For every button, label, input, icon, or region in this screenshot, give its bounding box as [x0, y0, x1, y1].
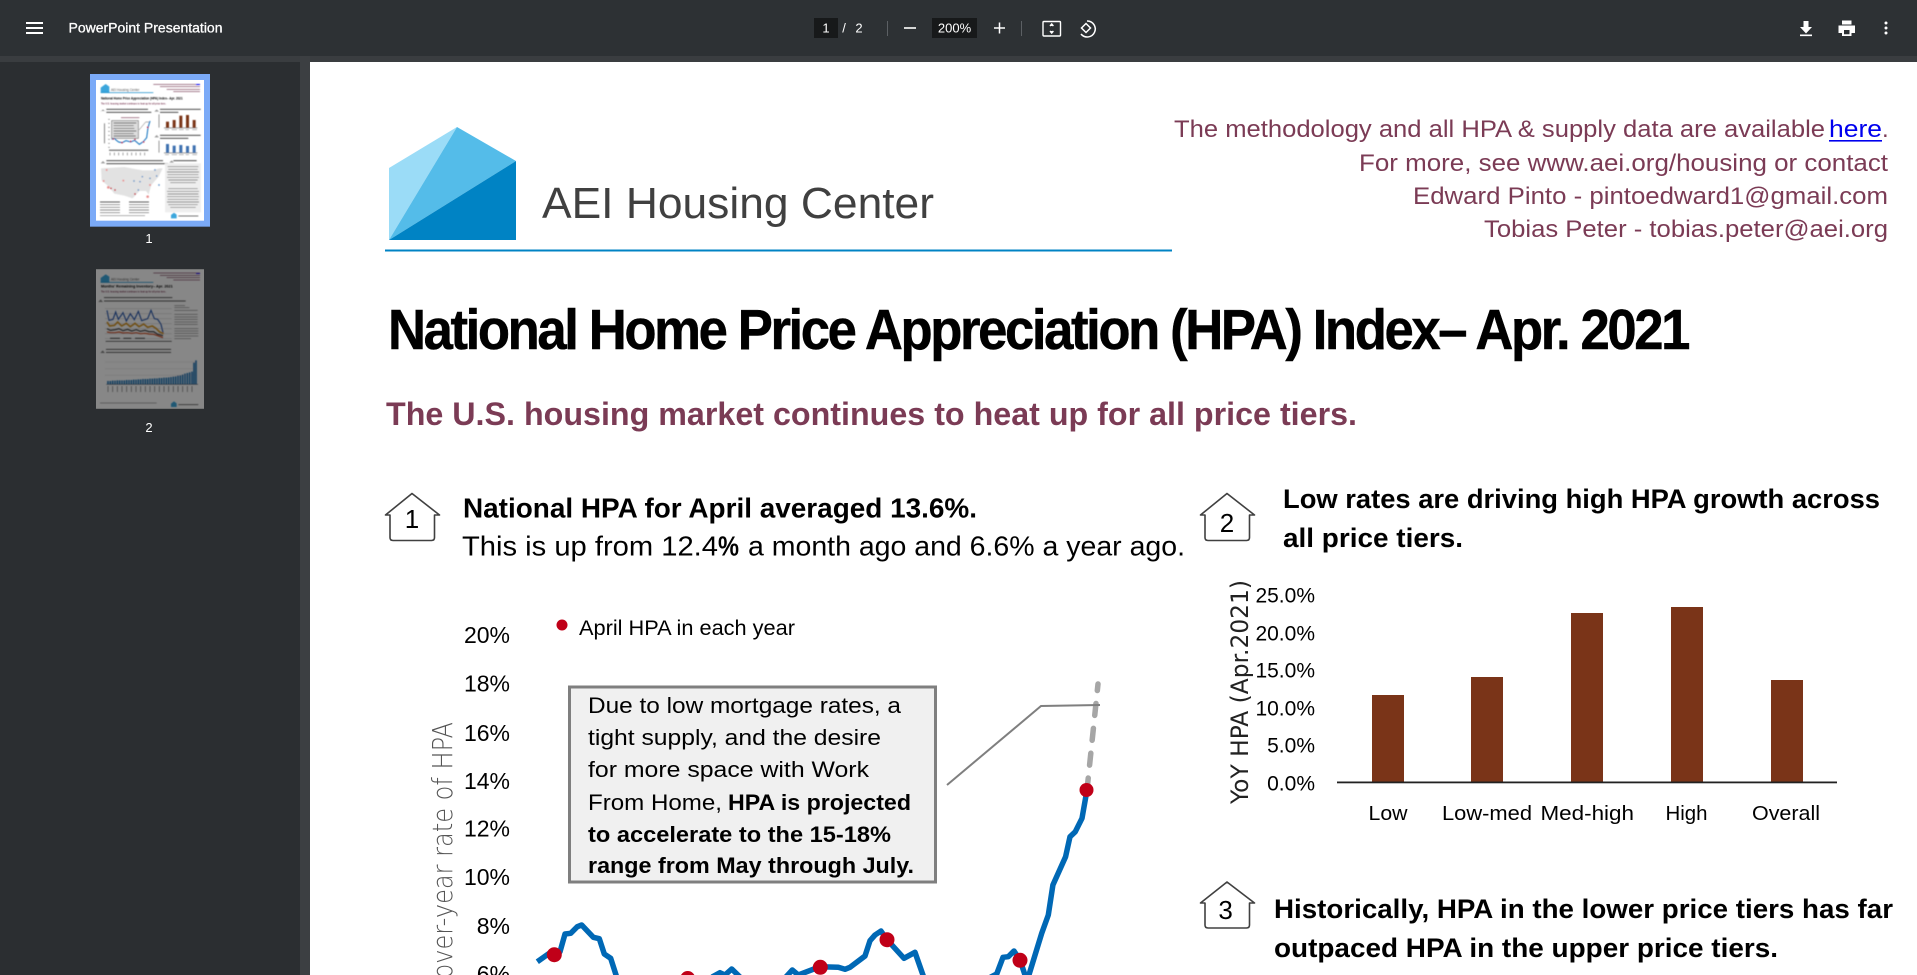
panel: page thumbnails: [90, 74, 210, 435]
thumbnail 2: AEI Housing Center: [111, 277, 140, 282]
section 1 detail: a month ago and 6.6% a year ago.: [748, 530, 1185, 562]
thumbnail 1: [90, 74, 210, 227]
section 1 detail: %: [718, 530, 739, 562]
section 3 heading: [1200, 882, 1893, 963]
thumbnail 2: Months' Remaining Inventory– Apr. 2021: [101, 284, 173, 289]
subtitle: The U.S. housing market continues to heat up for all price tiers.: [386, 396, 1357, 432]
text block: contact and methodology: Edward Pinto - pintoedward1@gmail.com: [1413, 183, 1888, 210]
thumbnail 2 number: 2: [145, 420, 153, 435]
icon: house logo: [389, 127, 516, 240]
icon: fit to page: [1043, 22, 1060, 36]
y axis title: YoY HPA (Apr.2021): [1226, 580, 1254, 805]
page indicator: [822, 20, 863, 36]
y axis labels: 20%: [464, 622, 510, 648]
section 1 headline: National HPA for April averaged 13.6%.: [463, 492, 977, 524]
text block: contact and methodology: Tobias Peter - tobias.peter@aei.org: [1484, 216, 1888, 243]
y axis labels: 12%: [464, 816, 510, 842]
icon: rotate: [1081, 21, 1095, 37]
section 3 headline: [1274, 894, 1893, 963]
panel: document page: [310, 62, 1917, 975]
x axis labels: [1368, 803, 1820, 825]
panel: viewer toolbar: [0, 0, 1917, 56]
callout: Due to low mortgage rates, a: [588, 693, 902, 718]
section 2 headline: Low rates are driving high HPA growth across: [1283, 484, 1880, 514]
x axis labels: High: [1666, 803, 1708, 825]
icon: house number 2: 2: [1220, 508, 1234, 538]
icon: house number 3: [1200, 882, 1254, 928]
page number box: [814, 18, 838, 38]
section 2 headline: [1283, 484, 1880, 553]
zoom level: 200%: [938, 20, 972, 36]
page indicator: 1: [822, 20, 830, 36]
section 1 detail: This is up from 12.4: [462, 530, 718, 562]
icon: zoom in: [994, 22, 1005, 34]
text block: contact and methodology: .: [1882, 116, 1889, 143]
thumbnail 1 number: 1: [145, 231, 153, 246]
icon: menu: [26, 23, 43, 33]
thumbnail 1: AEI Housing Center: [111, 87, 140, 92]
icon: house number 2: [1200, 494, 1254, 540]
section 1 heading: [386, 492, 1185, 562]
callout: tight supply, and the desire: [588, 725, 881, 750]
y axis labels: [464, 622, 510, 975]
icon: print: [1838, 20, 1855, 36]
icon: download: [1800, 21, 1812, 36]
page indicator: /: [842, 20, 846, 36]
callout: range from May through July.: [588, 853, 914, 878]
page indicator: 2: [855, 20, 863, 36]
legend: April HPA in each year: [579, 616, 795, 640]
section 1 detail: [462, 530, 1185, 562]
thumbnail 1: National Home Price Appreciation (HPA) Index– Apr. 2021: [101, 95, 183, 100]
text block: contact and methodology: For more, see www.aei.org/housing or contact: [1359, 150, 1888, 177]
icon: house number 1: [386, 494, 440, 540]
y axis labels: 20.0%: [1255, 622, 1315, 646]
zoom box: [932, 18, 977, 38]
callout leader line: [947, 705, 1100, 785]
section 3 headline: Historically, HPA in the lower price tiers has far: [1274, 894, 1893, 924]
y axis labels: 10%: [464, 864, 510, 890]
y axis labels: 15.0%: [1255, 660, 1315, 682]
y axis labels: 0.0%: [1267, 772, 1315, 796]
line chart: year-over-year HPA: [426, 616, 1100, 975]
callout: From Home,: [588, 790, 722, 815]
bars: [1372, 607, 1803, 782]
document name: PowerPoint Presentation: [68, 20, 222, 36]
section 3 headline: outpaced HPA in the upper price tiers.: [1274, 933, 1778, 963]
x axis labels: Overall: [1752, 803, 1820, 825]
y axis labels: 18%: [464, 670, 510, 696]
thumbnail 1: The U.S. housing market continues to heat up for all price tiers.: [101, 102, 166, 105]
icon: more: [1884, 22, 1888, 34]
y axis labels: 5.0%: [1267, 734, 1315, 758]
x axis labels: Low-med: [1442, 803, 1532, 825]
callout: [570, 687, 936, 882]
text block: contact and methodology: The methodology and all HPA & supply data are available: [1174, 116, 1825, 143]
x axis labels: Low: [1368, 803, 1408, 825]
callout: to accelerate to the 15-18%: [588, 822, 891, 847]
callout: HPA is projected: [728, 790, 911, 815]
projection dashed line: [1087, 684, 1098, 790]
y axis labels: 25.0%: [1255, 584, 1315, 608]
callout: for more space with Work: [588, 757, 870, 782]
icon: zoom out: [904, 27, 916, 29]
bar chart: YoY HPA by price tier: [1226, 580, 1837, 825]
y axis labels: [1255, 584, 1315, 796]
HPA line: [537, 790, 1087, 975]
logo: AEI Housing Center: [385, 127, 1172, 252]
logo wordmark: AEI Housing Center: [542, 179, 934, 228]
y axis labels: 16%: [464, 720, 510, 746]
icon: house number 1: 1: [405, 504, 419, 534]
text block: contact and methodology: here: [1829, 116, 1882, 143]
section 2 heading: [1200, 484, 1880, 553]
x axis labels: Med-high: [1540, 803, 1634, 825]
thumbnail 2: The U.S. housing market continues to heat up for all price tiers.: [101, 291, 166, 294]
thumbnail 2: [96, 269, 204, 409]
icon: house number 3: 3: [1218, 895, 1233, 925]
y axis labels: 10.0%: [1255, 698, 1315, 720]
y axis labels: 8%: [477, 913, 510, 939]
title: National Home Price Appreciation (HPA) Index– Apr. 2021: [388, 298, 1690, 362]
section 2 headline: all price tiers.: [1283, 523, 1463, 553]
text block: contact and methodology: [1174, 116, 1889, 243]
y axis labels: 14%: [464, 768, 510, 794]
April markers: [547, 783, 1094, 975]
